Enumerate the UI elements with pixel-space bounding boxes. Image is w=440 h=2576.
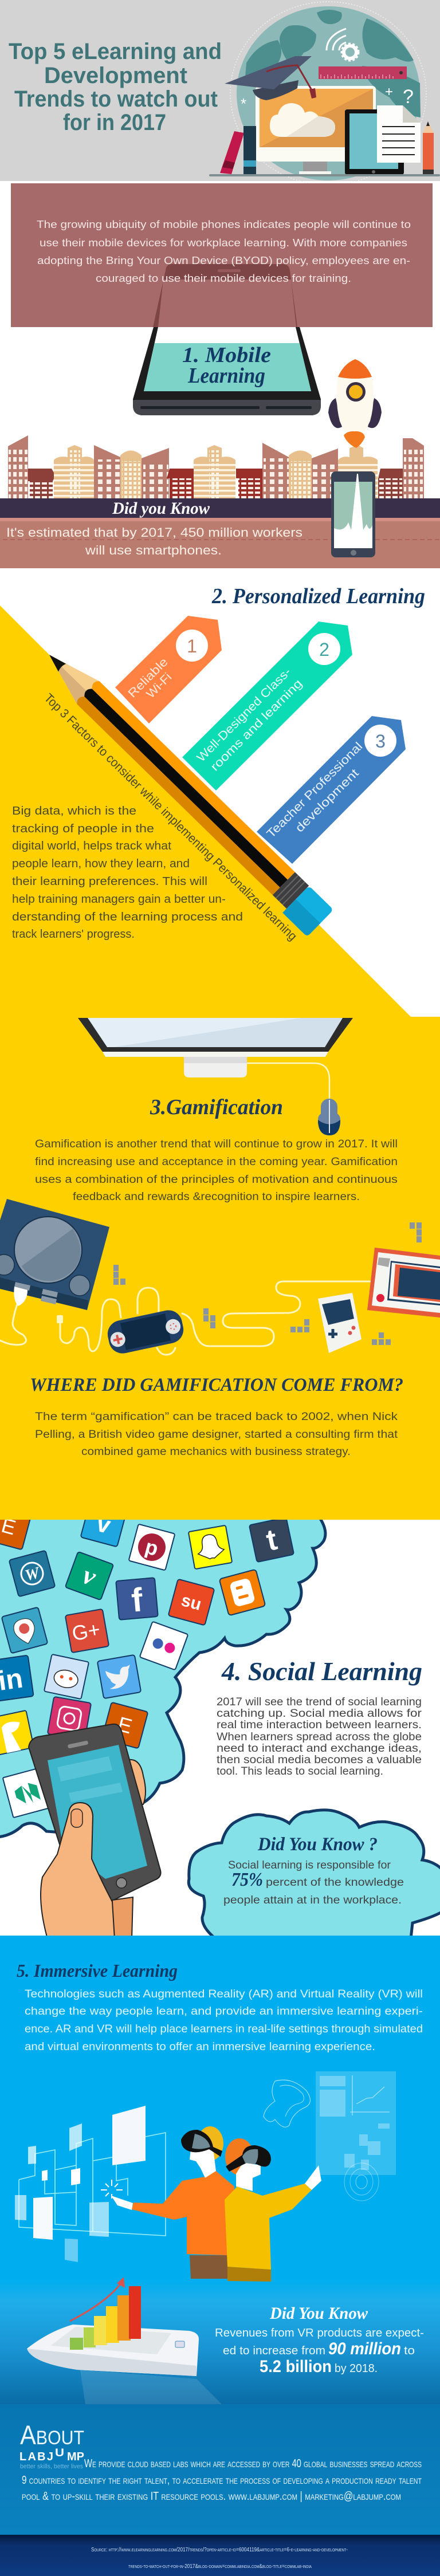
fact text: will use smartphones. bbox=[85, 543, 222, 557]
callout: VR revenue fact: 5.2 billion bbox=[260, 2357, 332, 2376]
text block: gamification: uses a combination of the principles of motivation and continuous bbox=[35, 1174, 398, 1186]
text block: immersive learning: ence. AR and VR will help place learners in real-life settings through simulated bbox=[25, 2023, 423, 2035]
symbols: * bbox=[241, 95, 246, 112]
icon: wordpress bbox=[9, 1551, 55, 1596]
icon: stumbleupon: su bbox=[179, 1591, 203, 1614]
text block: big data: help training managers gain a better un- bbox=[12, 893, 226, 906]
factor banner 3: 3 bbox=[375, 731, 386, 752]
text block: big data: tracking of people in the bbox=[12, 823, 154, 835]
icon: smartphone with rising bar chart bbox=[27, 2277, 222, 2404]
factor banner 1: Reliable bbox=[125, 655, 171, 701]
callout text: social learning fact: Did You Know ? bbox=[257, 1834, 378, 1855]
factor banner 3: development bbox=[293, 766, 362, 835]
data screen panel bbox=[264, 2071, 396, 2201]
figure: orange VR user bbox=[111, 2126, 234, 2279]
icon: instagram bbox=[47, 1696, 92, 1735]
fact text bbox=[6, 525, 302, 557]
text block: big data bbox=[12, 805, 243, 941]
icon: medium bbox=[3, 1768, 49, 1818]
text block: origin of gamification: The term “gamification” can be traced back to 2002, when Nick bbox=[35, 1411, 398, 1423]
icon: game boy bbox=[318, 1293, 362, 1353]
panel: immersive learning background bbox=[0, 1936, 440, 2404]
icon: etsy lower: E bbox=[115, 1712, 135, 1738]
icon: smartphone launching rocket bbox=[328, 359, 382, 557]
heading: 1. Mobile Learning bbox=[182, 343, 271, 388]
title: Trends to watch out bbox=[14, 86, 218, 112]
text block: gamification: feedback and rewards &recognition to inspire learners. bbox=[73, 1191, 360, 1203]
intro text bbox=[37, 219, 411, 284]
heading: 1. Mobile Learning: Learning bbox=[187, 364, 265, 388]
icon: stumbleupon bbox=[168, 1579, 214, 1625]
text block: big data: derstanding of the learning process and bbox=[12, 911, 243, 923]
icon: etsy top bbox=[0, 1520, 31, 1550]
icon: twitter bbox=[97, 1655, 141, 1698]
text block: social learning: need to interact and exchange ideas, bbox=[217, 1743, 422, 1755]
callout: VR revenue fact: 90 million bbox=[328, 2339, 401, 2358]
symbols bbox=[241, 84, 414, 112]
intro text: couraged to use their mobile devices for training. bbox=[96, 273, 351, 284]
text block: immersive learning: and virtual environments to offer an immersive learning experience. bbox=[25, 2041, 375, 2053]
icon: globe bbox=[230, 2, 426, 185]
icon: etsy lower bbox=[102, 1702, 148, 1748]
panel: mobile learning intro bbox=[11, 183, 433, 327]
icon: usb plug bbox=[57, 1315, 63, 1323]
callout: VR revenue fact: ed to increase from bbox=[223, 2345, 325, 2357]
heading: did you know: Did you Know bbox=[112, 499, 210, 518]
fact text: It's estimated that by 2017, 450 million workers bbox=[6, 525, 302, 540]
pencil caption: Top 3 Factors to consider while implementing Personalized learning bbox=[42, 691, 300, 943]
text block: social learning: then social media becomes a valuable bbox=[217, 1754, 422, 1766]
text block: immersive learning: change the way people learn, and provide an immersive learning experi- bbox=[25, 2005, 423, 2017]
title: Top 5 eLearning and bbox=[9, 39, 222, 64]
cables bbox=[0, 1281, 371, 1355]
text block: social learning: 2017 will see the trend of social learning bbox=[217, 1696, 422, 1708]
heading: where did gamification come from: WHERE DID GAMIFICATION COME FROM? bbox=[30, 1375, 403, 1395]
text block: big data: their learning preferences. This will bbox=[12, 875, 207, 888]
virtual interface panels bbox=[15, 2106, 166, 2262]
heading: 5. Immersive Learning: 5. Immersive Learning bbox=[17, 1960, 178, 1981]
text block: social learning: When learners spread across the globe bbox=[217, 1731, 422, 1743]
heading: 1. Mobile Learning: 1. Mobile bbox=[182, 343, 271, 367]
callout text: social learning fact: people attain at in the workplace. bbox=[223, 1894, 402, 1906]
factor banner 2: rooms and learning bbox=[208, 677, 305, 774]
icon: snapchat bbox=[188, 1525, 232, 1569]
icon: vine bbox=[65, 1552, 113, 1600]
footer: source: Source: http://www.elearninglearning.com/2017/trends/?open-article-id=6004119&article-title=6-e-learning-and-development- bbox=[91, 2547, 348, 2553]
intro text: The growing ubiquity of mobile phones indicates people will continue to bbox=[37, 219, 411, 230]
tetris blocks bbox=[113, 1222, 422, 1345]
icon: books bbox=[220, 126, 256, 174]
icon: handheld game and watch bbox=[367, 1248, 440, 1318]
intro text: use their mobile devices for workplace learning. With more companies bbox=[40, 237, 407, 249]
text block: social learning: real time interaction between learners. bbox=[217, 1719, 422, 1731]
text block: big data: track learners' progress. bbox=[12, 928, 135, 941]
callout text: social learning fact bbox=[223, 1834, 404, 1906]
text block: gamification bbox=[35, 1138, 398, 1203]
icon: tumblr bbox=[249, 1517, 294, 1562]
icon: wordpress: W bbox=[23, 1564, 42, 1585]
icon: graduation cap bbox=[225, 56, 316, 100]
logo: labjump bbox=[19, 2447, 84, 2470]
symbols: ? bbox=[403, 86, 414, 108]
callout text: social learning fact: percent of the knowledge bbox=[266, 1877, 404, 1889]
text block: immersive learning: Technologies such as Augmented Reality (AR) and Virtual Reality (VR) will bbox=[25, 1988, 423, 2000]
icon: vimeo bbox=[80, 1520, 125, 1547]
text block: gamification: find increasing use and acceptance in the coming year. Gamification bbox=[35, 1156, 398, 1168]
icon: wifi and gear bbox=[327, 29, 359, 61]
icon: desktop monitor and mouse bbox=[78, 1018, 353, 1135]
heading: 4. Social Learning: 4. Social Learning bbox=[221, 1657, 422, 1686]
icon: vine: v bbox=[79, 1560, 100, 1591]
icon: facebook bbox=[116, 1578, 158, 1621]
text block: social learning bbox=[217, 1696, 422, 1777]
callout: VR revenue fact: Did You Know bbox=[269, 2304, 368, 2323]
icon: game console bbox=[0, 1199, 109, 1310]
factor banner 1 bbox=[115, 616, 222, 723]
about text bbox=[22, 2457, 422, 2503]
factor banner 1: 1 bbox=[187, 636, 197, 656]
mouse bbox=[318, 1099, 340, 1135]
icon: reddit bbox=[44, 1654, 89, 1699]
footer: source bbox=[0, 2535, 440, 2576]
logo: labjump: MP bbox=[67, 2451, 84, 2463]
icon: tumblr: t bbox=[264, 1523, 280, 1558]
icon: google plus bbox=[65, 1609, 109, 1653]
icon: blogger bbox=[219, 1570, 265, 1615]
text block: social learning: catching up. Social media allows for bbox=[217, 1708, 422, 1720]
icon: ruler bbox=[319, 66, 407, 79]
header band bbox=[0, 0, 440, 185]
text block: big data: digital world, helps track what bbox=[12, 840, 171, 852]
icon: phone top through panel bbox=[153, 264, 297, 327]
icon: vimeo: v bbox=[94, 1509, 114, 1539]
panel: about labjump bbox=[0, 2404, 440, 2535]
icon: tablet bbox=[345, 109, 404, 175]
icon: linkedin bbox=[0, 1655, 34, 1702]
yellow background section bbox=[0, 605, 440, 1520]
callout: VR revenue fact: Revenues from VR products are expect- bbox=[215, 2327, 424, 2339]
icon: google plus: G+ bbox=[70, 1617, 102, 1645]
factor banner 3 bbox=[257, 716, 406, 864]
skyline bbox=[8, 435, 424, 498]
heading: 3. Gamification: 3.Gamification bbox=[150, 1095, 283, 1119]
figure: yellow VR user bbox=[225, 2138, 321, 2282]
intro text: adopting the Bring Your Own Device (BYOD) policy, employees are en- bbox=[37, 255, 410, 266]
title: for in 2017 bbox=[63, 110, 166, 135]
heading: 2. Personalized Learning: 2. Personalized Learning bbox=[211, 584, 425, 608]
footer: source: trends-to-watch-out-for-in-2017&blog-domain=commlabindia.com&blog-title=commlab-india bbox=[128, 2563, 312, 2570]
icon: pinterest bbox=[129, 1524, 175, 1570]
callout cloud: social learning fact bbox=[188, 1810, 440, 1939]
factor banner 2 bbox=[182, 622, 352, 791]
did you know band: mobile bbox=[0, 498, 440, 568]
text block: origin of gamification bbox=[35, 1411, 398, 1458]
text block: big data: people learn, how they learn, and bbox=[12, 858, 190, 870]
callout text: social learning fact: Social learning is responsible for bbox=[228, 1859, 391, 1871]
icon: hand holding phone bbox=[29, 1724, 161, 1939]
icon: phone with section heading bbox=[133, 327, 321, 415]
title: Development bbox=[44, 63, 187, 88]
logo: labjump: LABJ bbox=[19, 2451, 53, 2463]
icon: pencil bbox=[423, 121, 434, 175]
callout: VR revenue fact bbox=[215, 2304, 424, 2376]
about heading: ABOUT bbox=[20, 2420, 84, 2450]
factor banner 1: Wi-Fi bbox=[144, 671, 174, 701]
icon: meerkat bbox=[0, 1710, 34, 1755]
panel: social learning cloud bbox=[0, 1501, 440, 1939]
icon: handheld console bbox=[105, 1308, 186, 1356]
text block: big data: Big data, which is the bbox=[12, 805, 136, 817]
factor banner 3: Teacher Professional bbox=[264, 740, 365, 841]
text block: social learning: tool. This leads to social learning. bbox=[217, 1765, 383, 1777]
symbols: + bbox=[385, 84, 393, 100]
rocket bbox=[328, 359, 382, 448]
icon: pencil bbox=[34, 643, 333, 937]
text block: immersive learning bbox=[25, 1988, 423, 2053]
icon: facebook: f bbox=[130, 1581, 144, 1619]
text block: origin of gamification: Pelling, a British video game designer, started a consulting firm that bbox=[35, 1429, 398, 1441]
text block: gamification: Gamification is another trend that will continue to grow in 2017. It will bbox=[35, 1138, 398, 1150]
callout text: social learning fact: 75% bbox=[231, 1869, 263, 1890]
factor banner 2: 2 bbox=[319, 639, 329, 660]
factor banner 2: Well-Designed Class- bbox=[194, 665, 294, 765]
icon: periscope bbox=[2, 1607, 48, 1653]
text block: origin of gamification: combined game mechanics with business strategy. bbox=[81, 1446, 351, 1458]
callout: VR revenue fact: by 2018. bbox=[335, 2362, 378, 2375]
callout: VR revenue fact: to bbox=[404, 2345, 415, 2357]
icon: flickr bbox=[140, 1622, 188, 1670]
title bbox=[9, 39, 222, 135]
logo: labjump: better skills, better lives bbox=[20, 2463, 83, 2470]
icon: document bbox=[377, 105, 421, 163]
icon: pinterest: p bbox=[143, 1535, 161, 1560]
icon: monitor with cloud bbox=[256, 86, 376, 175]
logo: labjump: U bbox=[55, 2447, 64, 2459]
